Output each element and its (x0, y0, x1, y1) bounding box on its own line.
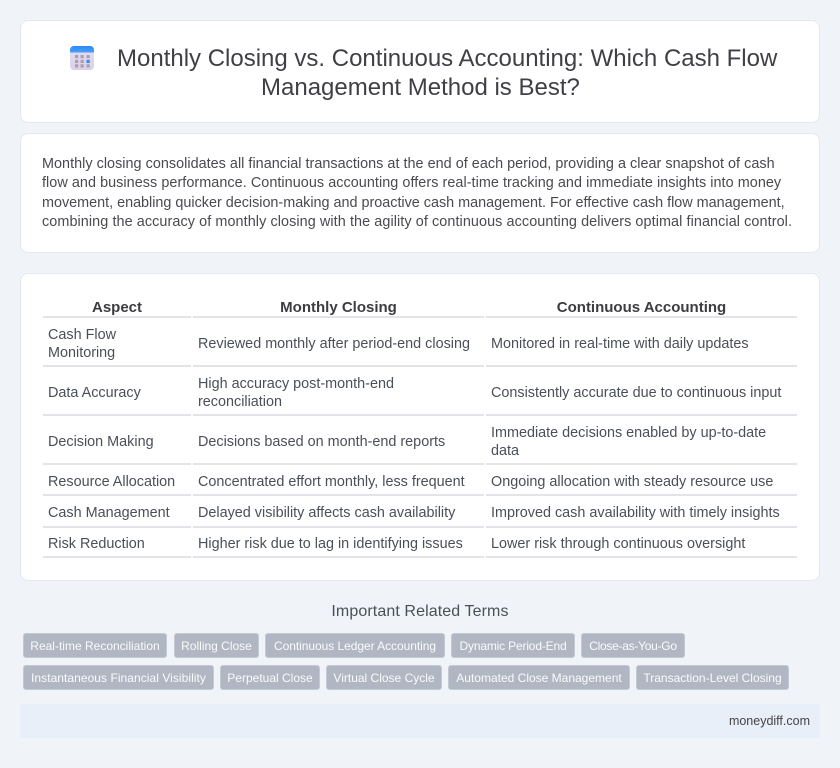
cell: Reviewed monthly after period-end closing (198, 336, 470, 352)
cell (198, 376, 394, 410)
cell: Consistently accurate due to continuous input (491, 385, 781, 401)
cell: High accuracy post-month-end (198, 376, 394, 392)
cell: data (491, 443, 519, 459)
tag (636, 665, 789, 690)
tag: Real-time Reconciliation (30, 639, 160, 653)
title (117, 45, 778, 101)
tag: Dynamic Period-End (460, 639, 566, 653)
title: Management Method is Best? (261, 74, 580, 101)
cell: Delayed visibility affects cash availability (198, 505, 455, 521)
row: decision making: Decision Making (48, 434, 154, 450)
summary text: Monthly closing consolidates all financial transactions at the end of each period, providing a clear snapshot of cash (42, 156, 775, 172)
panel: summary (20, 133, 820, 253)
footer bar (20, 704, 820, 738)
summary text: combining the accuracy of monthly closing with the agility of continuous accounting delivers optimal financial control. (42, 214, 792, 230)
row: resource allocation: Resource Allocation (48, 474, 175, 490)
tag: Transaction-Level Closing (643, 671, 782, 685)
summary text: movement, enabling quicker decision-making and proactive cash management. For effective cash flow management, (42, 195, 785, 211)
cell: Higher risk due to lag in identifying issues (198, 536, 463, 552)
cell: Concentrated effort monthly, less frequent (198, 474, 465, 490)
tag: Perpetual Close (227, 671, 313, 685)
tag (448, 665, 630, 690)
cell: Lower risk through continuous oversight (491, 536, 745, 552)
tag (451, 633, 575, 658)
table header: aspect: Aspect (92, 299, 142, 316)
tag: Rolling Close (181, 639, 252, 653)
cell: Immediate decisions enabled by up-to-date (491, 425, 766, 441)
row: cash flow monitoring (48, 327, 116, 361)
summary text: flow and business performance. Continuous accounting offers real-time tracking and immediate insights into money (42, 175, 781, 191)
icon: calendar (70, 46, 94, 70)
tag: Automated Close Management (456, 671, 622, 685)
footer credit: moneydiff.com (729, 714, 810, 728)
panel: comparison table (20, 273, 820, 581)
summary text (42, 156, 792, 230)
tag (220, 665, 320, 690)
tag (581, 633, 685, 658)
tag: Instantaneous Financial Visibility (31, 671, 206, 685)
table header: continuous accounting: Continuous Accounting (557, 299, 726, 316)
tag (174, 633, 259, 658)
tag: Continuous Ledger Accounting (274, 639, 436, 653)
row: data accuracy: Data Accuracy (48, 385, 141, 401)
cell: Improved cash availability with timely insights (491, 505, 780, 521)
cell: Ongoing allocation with steady resource use (491, 474, 773, 490)
row: cash management: Cash Management (48, 505, 170, 521)
cell (491, 425, 766, 459)
table header: monthly closing: Monthly Closing (280, 299, 397, 316)
title: Monthly Closing vs. Continuous Accounting: Which Cash Flow (117, 45, 777, 72)
related terms heading: Important Related Terms (331, 603, 509, 620)
row: cash flow monitoring: Monitoring (48, 345, 115, 361)
panel: title card (20, 20, 820, 123)
cell: Monitored in real-time with daily updates (491, 336, 749, 352)
tag (23, 633, 167, 658)
tag (23, 665, 214, 690)
row: cash flow monitoring: Cash Flow (48, 327, 116, 343)
cell: Decisions based on month-end reports (198, 434, 445, 450)
tag: Virtual Close Cycle (333, 671, 435, 685)
tag: Close-as-You-Go (589, 639, 677, 653)
cell: reconciliation (198, 394, 282, 410)
tag (326, 665, 442, 690)
row: risk reduction: Risk Reduction (48, 536, 145, 552)
tag (265, 633, 445, 658)
